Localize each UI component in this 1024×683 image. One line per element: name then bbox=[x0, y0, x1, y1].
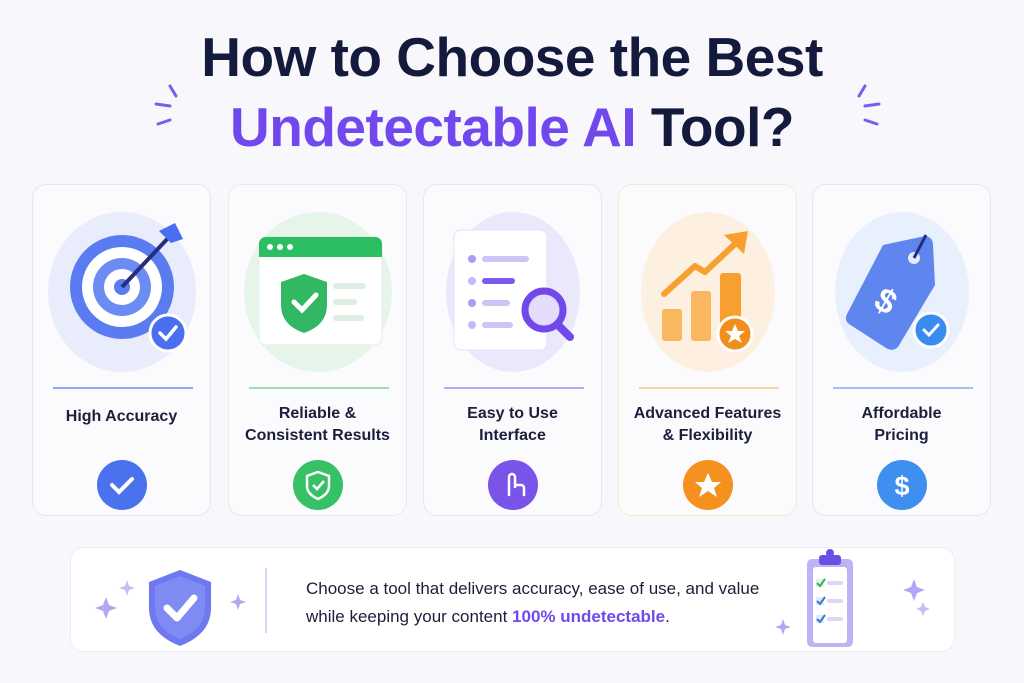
label: Consistent Results bbox=[245, 427, 390, 444]
icon: shield circle bbox=[293, 460, 343, 510]
panel: affordable pricing bbox=[812, 184, 991, 516]
label: High Accuracy bbox=[66, 408, 177, 425]
callout text bbox=[306, 579, 759, 626]
icon: target bbox=[48, 212, 196, 372]
icon: dollar circle: $ bbox=[894, 471, 910, 501]
decorative sparks left bbox=[154, 84, 178, 126]
label: Interface bbox=[479, 427, 546, 444]
label: & Flexibility bbox=[663, 427, 752, 444]
label bbox=[634, 405, 781, 444]
label bbox=[467, 405, 558, 444]
icon: chart bbox=[641, 212, 775, 372]
icon: star circle bbox=[683, 460, 733, 510]
panel: easy to use bbox=[423, 184, 602, 516]
panel: reliable bbox=[228, 184, 407, 516]
icon: price tag bbox=[835, 212, 969, 372]
icon: browser shield bbox=[244, 212, 392, 372]
icon: tap circle bbox=[488, 460, 538, 510]
title: Undetectable AI Tool? bbox=[230, 96, 794, 158]
label: Pricing bbox=[874, 427, 929, 444]
title: How to Choose the Best bbox=[201, 26, 823, 88]
icon: check circle bbox=[97, 460, 147, 510]
label: Affordable bbox=[862, 405, 942, 422]
callout text: Choose a tool that delivers accuracy, ease of use, and value bbox=[306, 579, 759, 598]
label: Reliable & bbox=[279, 405, 356, 422]
label bbox=[245, 405, 390, 444]
icon: shield with sparkles bbox=[95, 570, 246, 646]
icon: document search bbox=[446, 212, 580, 372]
label: Easy to Use bbox=[467, 405, 558, 422]
label: Advanced Features bbox=[634, 405, 781, 422]
icon: price tag: $ bbox=[868, 280, 903, 323]
panel: high accuracy bbox=[32, 184, 211, 516]
callout text: while keeping your content 100% undetectable. bbox=[306, 607, 670, 626]
panel: advanced features bbox=[618, 184, 797, 516]
icon: dollar circle bbox=[877, 460, 927, 510]
decorative sparks right bbox=[857, 84, 880, 126]
icon: clipboard bbox=[775, 549, 930, 647]
label bbox=[862, 405, 942, 444]
title bbox=[201, 26, 823, 158]
panel: summary callout bbox=[70, 547, 955, 652]
